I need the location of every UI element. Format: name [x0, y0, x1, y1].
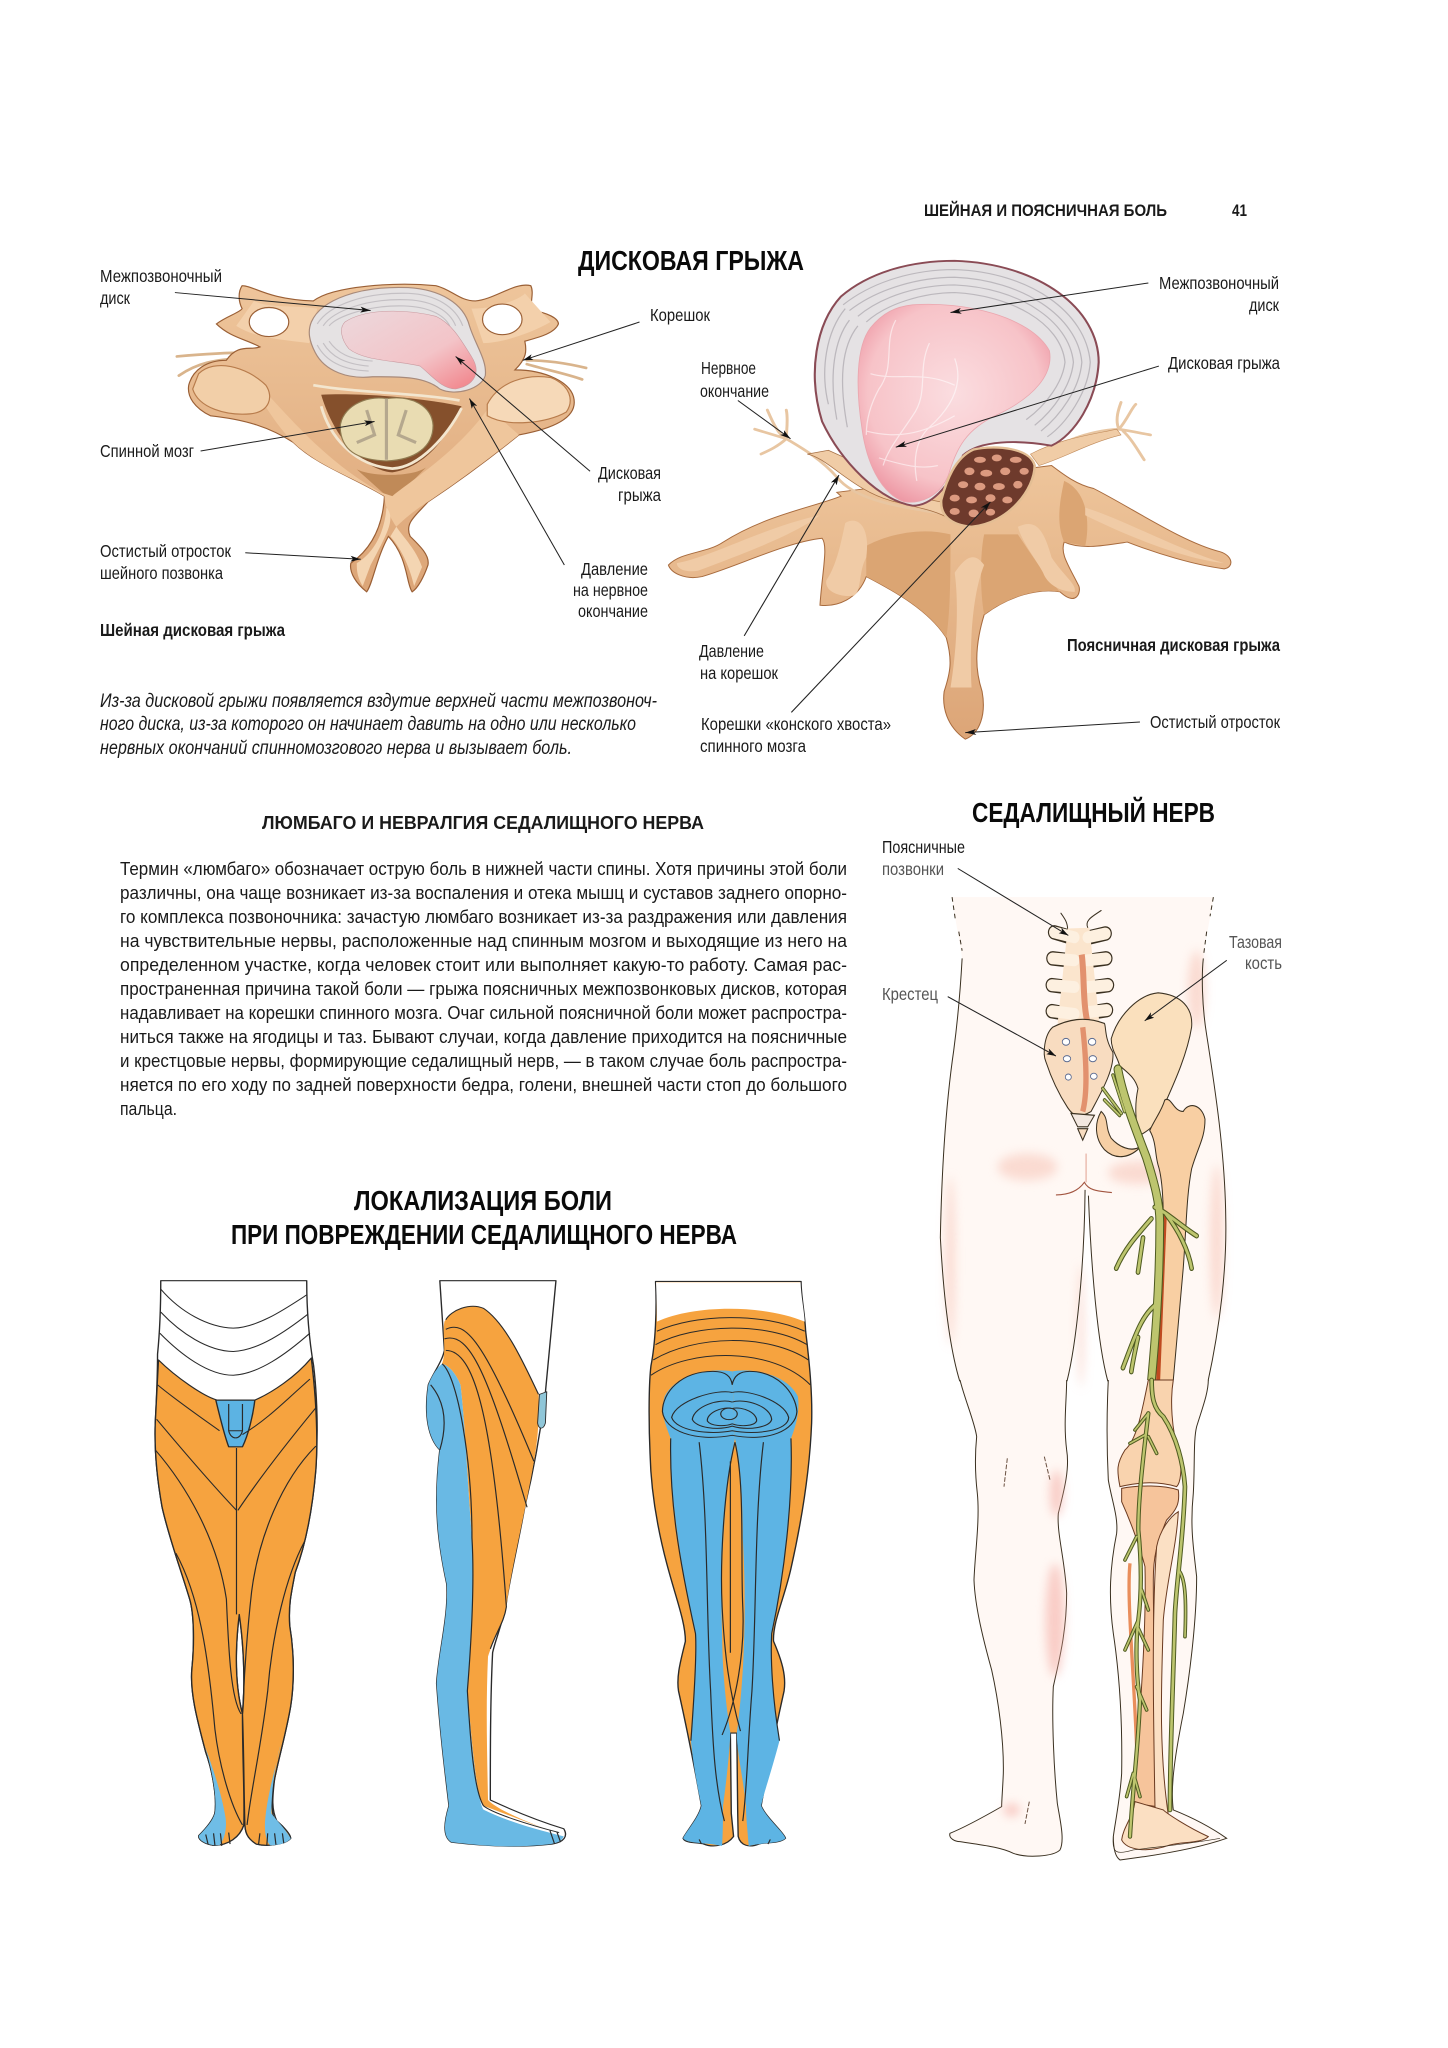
- lumbar vertebra bone: [668, 466, 1231, 739]
- vertebral foramina: [249, 307, 289, 337]
- spinal canal with cauda equina: [941, 447, 1035, 527]
- labels: sciatic figure: кость: [1245, 953, 1282, 973]
- figure: side view: [427, 1281, 566, 1846]
- body text: lumbago paragraph: [120, 858, 848, 1119]
- labels: lumbar panel: Корешки «конского хвоста»: [701, 714, 891, 734]
- body text: lumbago paragraph: пространенная причина такой боли — грыжа поясничных межпозвонковых дисков, которая: [120, 978, 847, 999]
- labels: lumbar panel: Нервное: [701, 358, 756, 378]
- arrows: [948, 868, 1227, 1056]
- labels: cervical panel: на нервное: [573, 580, 648, 600]
- body text: lumbago paragraph: Термин «люмбаго» обозначает острую боль в нижней части спины. Хотя причины этой боли: [120, 858, 847, 879]
- labels: cervical panel: Шейная дисковая грыжа: [100, 620, 285, 640]
- body outline upper: [940, 897, 1226, 1381]
- labels: lumbar panel: окончание: [700, 381, 769, 401]
- panel: pain localization legs: [155, 1281, 812, 1846]
- disc: [309, 287, 486, 392]
- bone shading: [866, 481, 1087, 638]
- labels: cervical panel: окончание: [578, 601, 648, 621]
- figure: rear view: [649, 1281, 812, 1846]
- labels: lumbar panel: спинного мозга: [700, 736, 806, 756]
- pelvic bone: [1096, 993, 1192, 1157]
- femur: [1150, 1099, 1205, 1381]
- labels: lumbar panel: Остистый отросток: [1150, 712, 1280, 732]
- caption: italic explanation: нервных окончаний спинномозгового нерва и вызывает боль.: [100, 738, 572, 759]
- heading: sciatic nerve: СЕДАЛИЩНЫЙ НЕРВ: [972, 796, 1215, 828]
- labels: cervical panel: Давление: [581, 559, 648, 579]
- heading: pain localization: [231, 1185, 737, 1250]
- body text: lumbago paragraph: ниться также на ягодицы и таз. Бывают случаи, когда давление приходится на поясничные: [120, 1026, 847, 1047]
- bone highlights: [677, 508, 1224, 688]
- heading: pain localization: ЛОКАЛИЗАЦИЯ БОЛИ: [354, 1185, 612, 1216]
- labels: cervical panel: Остистый отросток: [100, 541, 231, 561]
- sciatic nerve upper: [1103, 1069, 1197, 1381]
- panel: sciatic nerve figure, lower legs: [950, 1380, 1227, 1860]
- body text: lumbago paragraph: пальца.: [120, 1098, 177, 1119]
- sacrum: [1044, 1019, 1113, 1140]
- disc rings: [825, 270, 1090, 437]
- spinal cord: [340, 398, 433, 461]
- body text: lumbago paragraph: определенном участке, когда человек стоит или выполняет какую-то работу. Самая рас-: [120, 954, 847, 975]
- caption: italic explanation: Из-за дисковой грыжи появляется вздутие верхней части межпозвоноч-: [100, 691, 657, 712]
- body text: lumbago paragraph: няется по его ходу по задней поверхности бедра, голени, внешней части стоп до большого: [120, 1074, 847, 1095]
- labels: sciatic figure: [882, 837, 1282, 1004]
- running header: 41: [1232, 201, 1247, 220]
- disc: [815, 261, 1099, 506]
- figure: front view: [155, 1281, 317, 1846]
- herniated nucleus pulposus: [858, 304, 1050, 502]
- labels: cervical panel: Спинной мозг: [100, 441, 194, 461]
- arrows: [175, 293, 639, 565]
- heading: lumbago section: ЛЮМБАГО И НЕВРАЛГИЯ СЕДАЛИЩНОГО НЕРВА: [262, 813, 704, 833]
- labels: lumbar panel: Поясничная дисковая грыжа: [1067, 635, 1280, 655]
- title: disc herniation: ДИСКОВАЯ ГРЫЖА: [578, 245, 804, 276]
- body text: lumbago paragraph: го комплекса позвоночника: зачастую люмбаго возникает из-за раздражения или давления: [120, 906, 847, 927]
- caption: italic explanation: [100, 691, 657, 759]
- body text: lumbago paragraph: различны, она чаще возникает из-за воспаления и отека мышц и суставов заднего опорно-: [120, 882, 847, 903]
- labels: lumbar panel: Межпозвоночный: [1159, 273, 1279, 293]
- body text: lumbago paragraph: на чувствительные нервы, расположенные над спинным мозгом и выходящие из него на: [120, 930, 848, 951]
- leg shading: [1003, 1470, 1064, 1817]
- right lower leg: [1107, 1380, 1227, 1860]
- body text: lumbago paragraph: и крестцовые нервы, формирующие седалищный нерв, — в таком случае боль распростра-: [120, 1050, 847, 1071]
- labels: cervical panel: шейного позвонка: [100, 563, 223, 583]
- vertebra bone: [188, 284, 574, 592]
- labels: lumbar panel: [699, 273, 1280, 756]
- herniated nucleus: [341, 311, 476, 389]
- panel: cervical disc herniation illustration: [175, 284, 639, 592]
- nucleus cell lines: [866, 320, 958, 481]
- labels: sciatic figure: Крестец: [882, 984, 938, 1004]
- nerve roots: [755, 402, 1150, 519]
- facet surfaces: [193, 366, 270, 414]
- arrows: [738, 283, 1159, 733]
- left lower leg: [950, 1380, 1068, 1856]
- labels: cervical panel: Корешок: [650, 305, 710, 325]
- panel: lumbar disc herniation illustration: [668, 261, 1231, 739]
- labels: lumbar panel: на корешок: [700, 663, 778, 683]
- labels: cervical panel: грыжа: [618, 485, 661, 505]
- nerve roots: [177, 353, 586, 379]
- running header: ШЕЙНАЯ И ПОЯСНИЧНАЯ БОЛЬ: [924, 201, 1167, 220]
- lumbar vertebrae: [1052, 911, 1108, 1023]
- sciatic nerve lower: [1125, 1380, 1186, 1837]
- disc rings: [317, 293, 463, 371]
- spinal canal membrane: [313, 385, 462, 469]
- canal floor and lamina shadow: [357, 467, 426, 500]
- caption: italic explanation: ного диска, из-за которого он начинает давить на одно или несколько: [100, 714, 636, 735]
- labels: sciatic figure: Поясничные: [882, 837, 965, 857]
- labels: lumbar panel: Дисковая грыжа: [1168, 353, 1280, 373]
- skin shading: [946, 951, 1223, 1387]
- heading: pain localization: ПРИ ПОВРЕЖДЕНИИ СЕДАЛИЩНОГО НЕРВА: [231, 1219, 737, 1250]
- labels: cervical panel: [100, 266, 710, 640]
- labels: lumbar panel: Давление: [699, 641, 764, 661]
- lamina highlights: [250, 378, 519, 527]
- labels: cervical panel: Межпозвоночный: [100, 266, 222, 286]
- labels: cervical panel: Дисковая: [598, 463, 661, 483]
- labels: sciatic figure: позвонки: [882, 859, 944, 879]
- body text: lumbago paragraph: надавливает на корешки спинного мозга. Очаг сильной поясничной боли может распростра-: [120, 1002, 847, 1023]
- labels: lumbar panel: диск: [1249, 295, 1279, 315]
- labels: sciatic figure: Тазовая: [1229, 932, 1282, 952]
- panel: sciatic nerve figure, upper body: [940, 868, 1227, 1387]
- labels: cervical panel: диск: [100, 288, 130, 308]
- leg bones: [1118, 1380, 1208, 1850]
